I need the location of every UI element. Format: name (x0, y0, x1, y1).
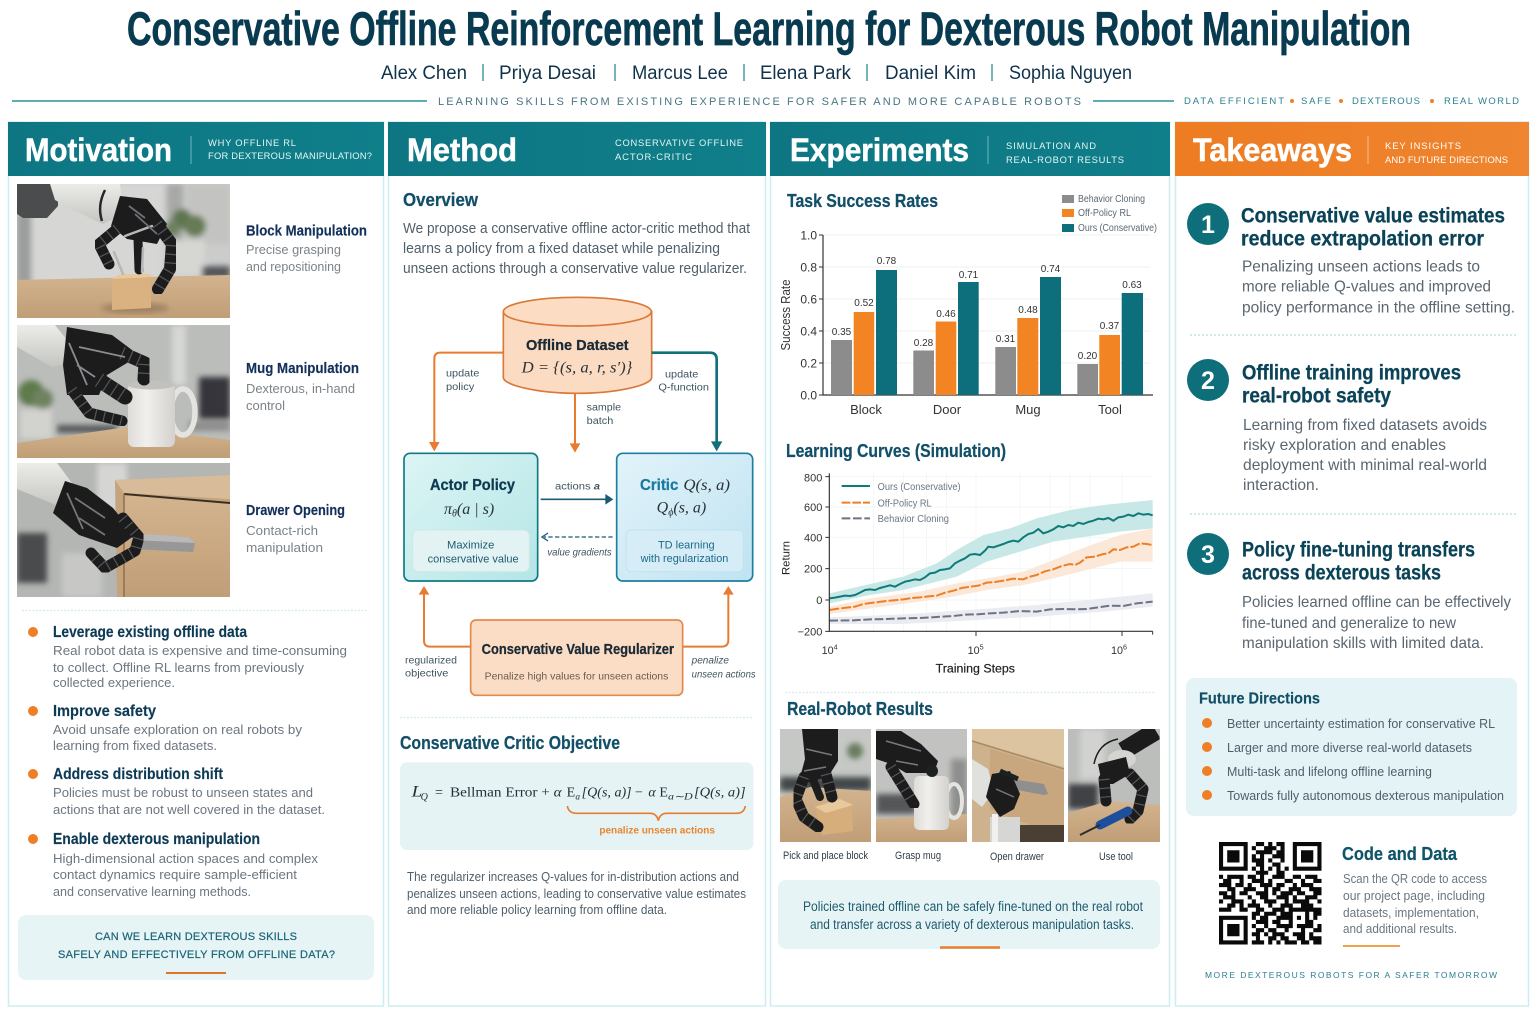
arrow: update policy (429, 353, 503, 451)
closing tagline: MORE DEXTEROUS ROBOTS FOR A SAFER TOMORROW (1205, 970, 1497, 980)
bar chart: task success rates: 0.8 (800, 260, 817, 274)
formula box: L (410, 784, 422, 801)
takeaways header: Takeaways (1193, 132, 1352, 168)
takeaways header: AND FUTURE DIRECTIONS (1385, 154, 1508, 165)
code and data (1342, 844, 1487, 946)
formula box: a∼D (668, 792, 693, 802)
bullet: leverage existing offline data: collected experience. (53, 675, 175, 690)
line chart: learning curves: 5 (980, 642, 984, 651)
callout: results summary: Policies trained offline can be safely fine-tuned on the real robot (803, 899, 1143, 914)
conservative value regularizer box (471, 620, 683, 695)
takeaway 3: across dexterous tasks (1242, 562, 1441, 584)
motivation header: Motivation (25, 132, 172, 168)
takeaway 2: Learning from fixed datasets avoids (1243, 417, 1487, 434)
caption: block manipulation (246, 222, 367, 274)
takeaway 3: fine-tuned and generalize to new (1242, 615, 1456, 632)
subtitle strip: DATA EFFICIENT (1184, 96, 1284, 107)
bullet: enable dexterous manipulation (28, 831, 318, 899)
formula box: − (635, 786, 643, 801)
caption: drawer opening (246, 502, 345, 555)
caption: mug manipulation (246, 360, 359, 413)
learning curves heading: Learning Curves (Simulation) (786, 441, 1006, 461)
bars: mug: 0.74 (1041, 264, 1061, 275)
real-robot results heading: Real-Robot Results (787, 699, 933, 719)
bar chart: task success rates: 0.0 (800, 388, 817, 402)
offline dataset cylinder (503, 297, 652, 393)
offline dataset cylinder: D = {(s, a, r, s′)} (521, 360, 633, 377)
method flow diagram (404, 297, 756, 695)
actor policy box: Actor Policy (430, 477, 515, 494)
bars: block: 0.35 (832, 327, 852, 338)
bar chart: task success rates: 1.0 (800, 228, 817, 242)
arrow: update q-function (652, 353, 722, 451)
line chart: learning curves: −200 (798, 626, 822, 638)
takeaway 1: more reliable Q-values and improved (1242, 278, 1491, 296)
bullet: leverage existing offline data: Real robot data is expensive and time-consuming (53, 643, 347, 658)
bullet: leverage existing offline data: to collect. Offline RL learns from previously (53, 660, 304, 675)
conservative value regularizer box: Penalize high values for unseen actions (485, 671, 668, 682)
formula box: [Q(s, a)] (694, 786, 746, 801)
bullet: improve safety: Improve safety (53, 703, 156, 720)
bullet: enable dexterous manipulation: contact dynamics require sample-efficient (53, 867, 297, 882)
future directions box: Towards fully autonomous dexterous manipulation (1227, 788, 1504, 803)
future directions box: Better uncertainty estimation for conservative RL (1227, 716, 1495, 731)
method header: CONSERVATIVE OFFLINE (615, 137, 743, 148)
bullet: improve safety: learning from fixed datasets. (53, 738, 217, 753)
takeaway 1: reduce extrapolation error (1241, 228, 1484, 250)
arrow: regularized objective: objective (405, 669, 449, 680)
arrow: penalize unseen actions: penalize (691, 655, 729, 666)
takeaway 3: 3 (1201, 541, 1215, 569)
arrow: sample batch: sample (587, 403, 621, 414)
photo captions (783, 850, 1133, 863)
takeaway 3: Policy fine-tuning transfers (1242, 538, 1475, 562)
arrow: update policy: update (446, 369, 480, 380)
line chart: learning curves: 6 (1123, 642, 1127, 651)
critic box: ϕ (668, 507, 673, 518)
takeaway 1: Penalizing unseen actions leads to (1242, 258, 1480, 276)
line chart: learning curves: Return (780, 541, 792, 575)
line chart: learning curves: Training Steps (936, 661, 1015, 675)
objective explanation: and more reliable policy learning from offline data. (407, 903, 667, 917)
photo: drawer opening (17, 463, 230, 597)
arrow: actions a: actions a (555, 481, 600, 492)
line chart: learning curves: 10 (1111, 645, 1123, 657)
bar chart: task success rates: Success Rate (779, 279, 793, 350)
bar chart: task success rates: 0.2 (800, 356, 817, 370)
experiments header (770, 122, 1170, 176)
curve: ours (829, 513, 1153, 598)
motivation header (8, 122, 384, 176)
critic box: TD learning (658, 539, 715, 551)
caption: drawer opening: Drawer Opening (246, 502, 345, 519)
overview: We propose a conservative offline actor-critic method that (403, 220, 751, 237)
takeaway 3 (1187, 533, 1511, 652)
bar chart: task success rates: 0.4 (800, 324, 817, 338)
bar chart legend (1062, 194, 1157, 234)
bars: tool: 0.37 (1100, 321, 1120, 332)
authors: Marcus Lee (632, 63, 728, 84)
arrow: update policy: policy (446, 382, 474, 393)
arrow: update q-function: update (665, 370, 699, 381)
curve: behavior cloning (829, 602, 1153, 621)
bullet: address distribution shift: actions that are not well covered in the dataset. (53, 802, 325, 817)
line chart: learning curves: 600 (804, 502, 822, 514)
bar chart legend: Off-Policy RL (1078, 208, 1131, 219)
future directions box: Larger and more diverse real-world datasets (1227, 740, 1472, 755)
formula box: = (435, 786, 443, 801)
overview: unseen actions through a conservative value regularizer. (403, 260, 747, 277)
conservative value regularizer box: Conservative Value Regularizer (482, 642, 674, 658)
bullet: address distribution shift: Address distribution shift (53, 766, 224, 783)
takeaway 1: 1 (1201, 211, 1215, 239)
qr code (1219, 844, 1322, 942)
bullet: address distribution shift (28, 766, 325, 817)
bars: tool: 0.63 (1122, 280, 1142, 291)
code and data: and additional results. (1343, 922, 1457, 936)
takeaway 1 (1187, 203, 1515, 316)
motivation header: FOR DEXTEROUS MANIPULATION? (208, 150, 372, 161)
bar chart legend: Ours (Conservative) (1078, 223, 1157, 234)
subtitle strip: SAFE (1301, 96, 1331, 107)
formula box: Q (421, 792, 429, 803)
caption: mug manipulation: control (246, 398, 285, 413)
formula box: α (648, 786, 656, 801)
bars: door (913, 270, 979, 417)
objective explanation: The regularizer increases Q-values for in-distribution actions and (407, 870, 739, 884)
line chart: learning curves: 0 (816, 595, 822, 607)
bullet: enable dexterous manipulation: High-dimensional action spaces and complex (53, 851, 318, 866)
caption: block manipulation: Precise grasping (246, 242, 341, 257)
method header: ACTOR-CRITIC (615, 151, 692, 162)
bullet: improve safety (28, 703, 303, 753)
panel: motivation (8, 122, 384, 1006)
arrow: value gradients: value gradients (547, 548, 612, 559)
experiments header: Experiments (790, 132, 969, 168)
arrow: actions a (541, 481, 613, 505)
actor policy box: (a | s) (457, 501, 494, 518)
authors: Priya Desai (499, 63, 596, 84)
code and data: Code and Data (1342, 844, 1458, 864)
critic box: Q(s, a) (683, 477, 730, 494)
authors: Elena Park (760, 63, 851, 84)
formula box: a (575, 792, 580, 802)
formula box: E (659, 786, 668, 801)
panel: takeaways (1175, 122, 1529, 1006)
curve legend: Off-Policy RL (878, 498, 932, 509)
objective explanation (407, 870, 746, 917)
method header: Method (407, 132, 517, 168)
bars: tool: Tool (1098, 402, 1122, 417)
takeaway 1: policy performance in the offline setting. (1242, 300, 1515, 316)
curve: off-policy rl (829, 543, 1153, 610)
takeaway 2: Offline training improves (1242, 362, 1461, 384)
photo: use tool (1068, 729, 1160, 842)
authors: Alex Chen (381, 63, 467, 84)
bars: tool (1077, 280, 1143, 417)
experiments header: REAL-ROBOT RESULTS (1006, 154, 1124, 165)
line chart: learning curves (780, 473, 1153, 675)
photo: block manipulation (17, 184, 230, 318)
critic box: with regularization (640, 553, 728, 565)
photo captions: Use tool (1099, 851, 1133, 863)
overview: learns a policy from a fixed dataset while penalizing (403, 240, 720, 257)
actor policy box: Maximize (447, 539, 494, 551)
overview: Overview (403, 190, 479, 210)
caption: block manipulation: and repositioning (246, 259, 341, 274)
arrow: regularized objective (405, 586, 471, 680)
arrow: update q-function: Q-function (658, 383, 709, 394)
callout: research question: SAFELY AND EFFECTIVELY FROM OFFLINE DATA? (58, 949, 335, 961)
bars: block: 0.52 (854, 298, 874, 309)
arrow: value gradients (542, 533, 613, 559)
bars: door: 0.28 (914, 338, 934, 349)
authors: Sophia Nguyen (1009, 63, 1132, 84)
arrow: regularized objective: regularized (405, 655, 457, 666)
actor policy box: π (444, 501, 452, 518)
photo: pick and place block (780, 729, 871, 842)
takeaway 2: real-robot safety (1242, 384, 1391, 408)
line chart: learning curves: 400 (804, 532, 822, 544)
curve legend: Ours (Conservative) (878, 482, 961, 493)
method header (388, 122, 766, 176)
bar chart: task success rates: 0.6 (800, 292, 817, 306)
bar chart: task success rates (779, 191, 1157, 417)
conservative critic objective heading: Conservative Critic Objective (400, 733, 620, 753)
arrow: penalize unseen actions (683, 586, 756, 680)
authors (381, 63, 1132, 84)
takeaway 3: manipulation skills with limited data. (1242, 635, 1484, 652)
takeaway 3: Policies learned offline can be effectively (1242, 594, 1511, 611)
bullet: enable dexterous manipulation: Enable dexterous manipulation (53, 831, 260, 848)
critic box (617, 453, 753, 581)
line chart: learning curves: 200 (804, 564, 822, 576)
takeaway 2 (1187, 359, 1487, 494)
subtitle strip: LEARNING SKILLS FROM EXISTING EXPERIENCE FOR SAFER AND MORE CAPABLE ROBOTS (438, 96, 1081, 108)
bars: mug (995, 264, 1061, 417)
arrow: sample batch (570, 394, 621, 453)
photo: grasp mug (876, 729, 967, 842)
takeaway 2: interaction. (1243, 477, 1319, 494)
bar chart legend: Behavior Cloning (1078, 194, 1145, 205)
future directions box: Future Directions (1199, 690, 1320, 708)
bars: door: 0.46 (936, 309, 956, 320)
arrow: penalize unseen actions: unseen actions (692, 669, 756, 680)
panel: method (388, 122, 766, 1006)
caption: drawer opening: manipulation (246, 540, 323, 555)
critic box: (s, a) (673, 500, 706, 517)
subtitle strip: REAL WORLD (1444, 96, 1519, 107)
bars: mug: 0.48 (1018, 305, 1038, 316)
actor policy box: θ (452, 509, 457, 520)
photo captions: Open drawer (990, 851, 1044, 863)
line chart: learning curves: 10 (968, 645, 980, 657)
subtitle strip: DEXTEROUS (1352, 96, 1420, 107)
photo captions: Grasp mug (895, 850, 941, 862)
takeaways header: KEY INSIGHTS (1385, 140, 1461, 151)
line chart: learning curves: 10 (822, 645, 834, 657)
takeaway 1: Conservative value estimates (1241, 204, 1505, 228)
bullet: leverage existing offline data: Leverage existing offline data (53, 624, 247, 641)
takeaway 2: risky exploration and enables (1243, 437, 1446, 454)
bullet: improve safety: Avoid unsafe exploration on real robots by (53, 722, 303, 737)
overview (403, 190, 751, 277)
caption: block manipulation: Block Manipulation (246, 222, 367, 240)
formula box: penalize unseen actions (599, 825, 715, 836)
line chart: learning curves: 4 (834, 642, 838, 651)
takeaway 2: deployment with minimal real-world (1243, 457, 1487, 474)
callout: research question (18, 915, 374, 980)
authors: Daniel Kim (885, 63, 976, 84)
formula box (400, 762, 753, 850)
formula box: [Q(s, a)] (582, 786, 632, 801)
curve legend: Behavior Cloning (878, 514, 949, 525)
photo: open drawer (972, 729, 1064, 842)
caption: mug manipulation: Mug Manipulation (246, 360, 359, 377)
experiments header: SIMULATION AND (1006, 140, 1096, 151)
bars: mug: 0.31 (996, 334, 1016, 345)
subtitle strip (12, 96, 1519, 108)
future directions box: Multi-task and lifelong offline learning (1227, 764, 1432, 779)
motivation header: WHY OFFLINE RL (208, 137, 296, 148)
code and data: our project page, including (1343, 889, 1485, 903)
actor policy box: conservative value (428, 554, 519, 566)
bars: block (831, 256, 897, 417)
takeaway 2: 2 (1201, 367, 1215, 395)
actor policy box (404, 453, 538, 581)
bullet: address distribution shift: Policies must be robust to unseen states and (53, 785, 313, 800)
photo: mug manipulation (17, 325, 230, 458)
panel: experiments (770, 122, 1170, 1006)
line chart: learning curves: 800 (804, 473, 822, 485)
bars: tool: 0.20 (1078, 351, 1098, 362)
takeaways header (1175, 122, 1529, 176)
callout: results summary (778, 880, 1160, 949)
future directions box (1186, 678, 1517, 816)
bar chart: task success rates: Task Success Rates (787, 191, 938, 211)
code and data: Scan the QR code to access (1343, 872, 1487, 886)
photo captions: Pick and place block (783, 850, 868, 862)
formula box: Bellman Error + α (450, 786, 562, 801)
code and data: datasets, implementation, (1343, 906, 1479, 920)
bullet: leverage existing offline data (28, 624, 347, 690)
arrow: sample batch: batch (587, 416, 613, 427)
objective explanation: penalizes unseen actions, leading to conservative value estimates (407, 887, 746, 901)
bars: block: Block (850, 402, 882, 417)
critic box: Q (657, 500, 668, 517)
caption: mug manipulation: Dexterous, in-hand (246, 381, 355, 396)
bars: door: 0.71 (959, 270, 979, 281)
formula box: E (567, 786, 575, 801)
bars: mug: Mug (1015, 402, 1041, 417)
curve legend (842, 482, 961, 525)
critic box: Critic (640, 477, 679, 494)
caption: drawer opening: Contact-rich (246, 523, 318, 538)
bullet: enable dexterous manipulation: and conservative learning methods. (53, 884, 251, 899)
offline dataset cylinder: Offline Dataset (526, 338, 629, 354)
callout: research question: CAN WE LEARN DEXTEROUS SKILLS (95, 931, 297, 943)
callout: results summary: and transfer across a variety of dexterous manipulation tasks. (810, 917, 1134, 932)
bars: door: Door (933, 402, 962, 417)
bars: block: 0.78 (877, 256, 897, 267)
